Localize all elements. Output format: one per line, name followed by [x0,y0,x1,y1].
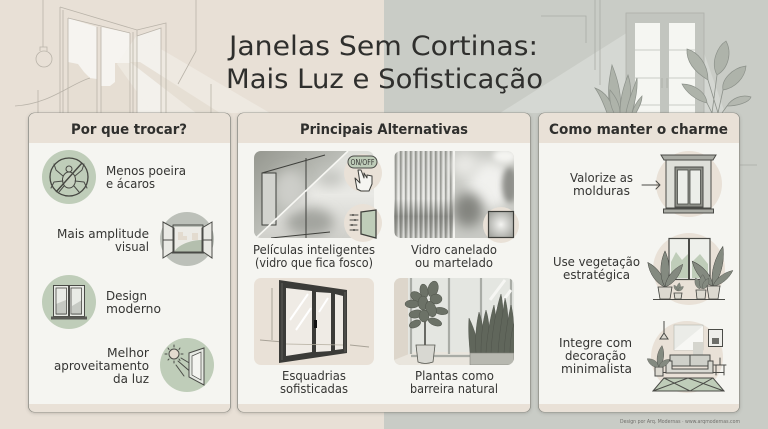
text: Design moderno: Design [106,288,147,303]
image: sophisticated window frames [254,278,374,365]
heading: Por que trocar? [71,122,187,138]
caption: Plantas como barreira natural: barreira natural [410,381,498,396]
panel card [538,113,740,412]
caption: Vidro canelado ou martelado [411,242,497,270]
title [226,31,543,95]
caption: Esquadrias sofisticadas: sofisticadas [280,381,348,396]
panel card [28,113,230,412]
icon: open window with view [160,212,214,266]
image: plants as natural barrier [394,278,516,365]
caption: Películas inteligentes: (vidro que fica fosco) [255,255,373,270]
icon: minimalist living room [646,321,726,393]
arrow [642,181,660,189]
text: Melhor aproveitamento da luz: da luz [113,371,149,386]
text: Mais amplitude visual: Mais amplitude [57,226,149,241]
icon: crossed out mite [42,150,96,204]
title: Mais Luz e Sofisticação [226,64,543,95]
text: Integre com decoração minimalista: Integre com [559,335,632,350]
text: Use vegetação estratégica: estratégica [563,267,630,282]
text: Melhor aproveitamento da luz [54,345,150,386]
caption: Películas inteligentes [253,242,375,270]
decorative scene: right window, wall lines and plants [500,0,751,113]
title: Janelas Sem Cortinas: [227,31,538,62]
text: Use vegetação estratégica [553,254,640,282]
caption: Esquadrias sofisticadas: Esquadrias [282,368,346,383]
text: Menos poeira e ácaros: e ácaros [106,176,155,191]
text: Design moderno: moderno [106,301,161,316]
panel: Por que trocar? [28,113,230,412]
text: Menos poeira e ácaros: Menos poeira [106,163,186,178]
text: Integre com decoração minimalista: decoração [565,348,626,363]
panel card [238,113,530,412]
image: fluted and hammered glass [394,149,519,243]
panel: Principais Alternativas [238,113,530,412]
caption: Vidro canelado ou martelado: Vidro canelado [411,242,497,257]
text: Integre com decoração minimalista [559,335,632,376]
caption: Plantas como barreira natural [410,368,498,396]
text: Menos poeira e ácaros [106,163,186,191]
text: Valorize as molduras [570,170,633,198]
text: Mais amplitude visual [57,226,149,254]
panel: Como manter o charme [538,113,740,412]
icon: modern window [42,275,96,329]
text: Melhor aproveitamento da luz: Melhor [107,345,150,360]
text: Valorize as molduras: molduras [573,183,630,198]
caption: Esquadrias sofisticadas [280,368,348,396]
image: smart film glass [254,151,382,242]
text: Mais amplitude visual: visual [115,239,149,254]
text: Use vegetação estratégica: Use vegetação [553,254,640,269]
text: Melhor aproveitamento da luz: aproveitamento [54,358,149,373]
icon: window with plants [645,233,735,305]
heading: Como manter o charme [549,122,728,138]
caption: Plantas como barreira natural: Plantas como [415,368,494,383]
footer credit: Design por Arq. Modernas · www.arqmodernas.com [620,419,740,425]
text: Valorize as molduras: Valorize as [570,170,633,185]
image: smart film glass: ON/OFF [350,158,374,167]
text: Design moderno [106,288,161,316]
caption: Películas inteligentes: Películas inteligentes [253,242,375,257]
icon: sun and window [160,338,214,392]
icon: moulded window [656,151,722,217]
text: Integre com decoração minimalista: minimalista [561,361,632,376]
heading: Principais Alternativas [300,122,468,138]
decorative wall line right of panel [739,164,757,166]
decorative scene: left window with light beam and pendant lamp [15,0,270,113]
caption: Vidro canelado ou martelado: ou martelado [415,255,493,270]
